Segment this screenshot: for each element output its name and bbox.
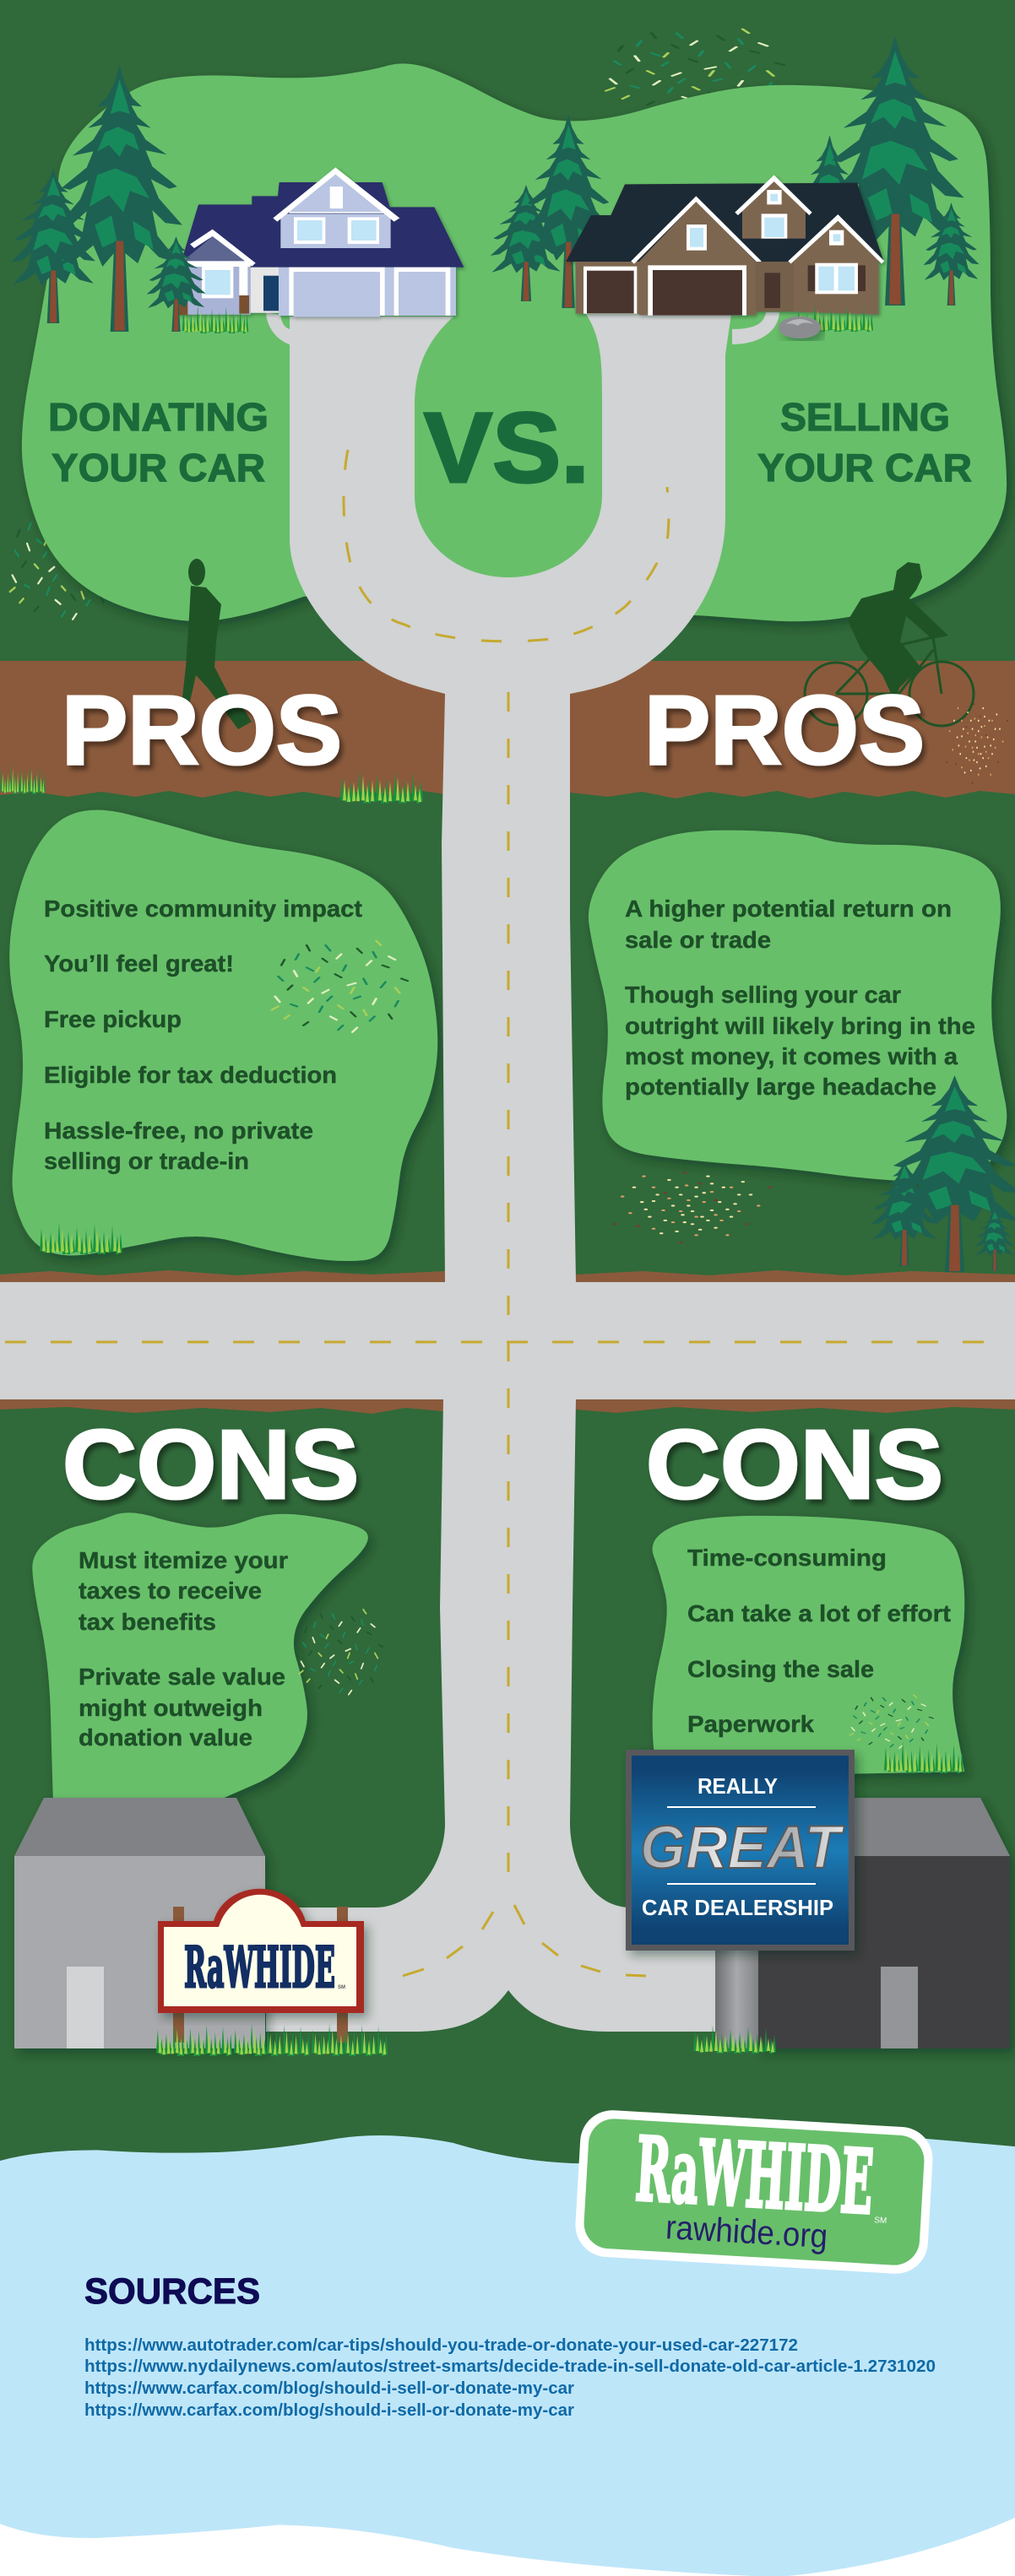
- dirt band: pros: [0, 661, 1015, 798]
- text block: selling pros: A higher potential return on: [625, 896, 952, 922]
- road centre dashes: [5, 450, 992, 1976]
- trees: top right: [791, 36, 980, 306]
- text block: donating pros: Hassle-free, no private: [44, 1118, 313, 1144]
- sign: great car dealership: CAR DEALERSHIP: [642, 1895, 833, 1920]
- grass in pros lawn: [40, 1222, 122, 1254]
- text block: selling pros: Though selling your car: [625, 982, 901, 1008]
- grass: blue house: [182, 306, 248, 333]
- heading: selling your car: [757, 395, 972, 490]
- panel: cons selling lawn: [653, 1516, 964, 1774]
- house: brown selling house: [566, 175, 884, 316]
- leaf cluster in cons left: [299, 1610, 383, 1695]
- grass under dealership sign: [693, 2026, 776, 2054]
- dots cluster in selling section: [615, 1172, 770, 1242]
- silhouette: walker: [179, 559, 252, 729]
- heading: cons left: CONS: [62, 1410, 359, 1519]
- text block: source links: [84, 2336, 936, 2420]
- sign: great car dealership: [626, 1750, 855, 2048]
- silhouette: cyclist: [805, 562, 974, 726]
- panel: cons donating lawn: [32, 1513, 368, 1799]
- text block: donating cons: [79, 1547, 288, 1751]
- text block: selling cons: [687, 1545, 951, 1737]
- trees: top left: [11, 65, 182, 332]
- sign: great car dealership: GREAT: [640, 1815, 844, 1881]
- text block: donating cons: Must itemize your: [79, 1547, 288, 1573]
- text block: selling pros: potentially large headache: [625, 1074, 936, 1100]
- dots cluster near right pros: [947, 704, 1007, 783]
- text block: selling pros: sale or trade: [625, 927, 771, 953]
- text block: donating cons: tax benefits: [79, 1609, 216, 1635]
- road network: [0, 312, 1015, 2032]
- heading: donating your car: YOUR CAR: [52, 446, 265, 490]
- text block: donating pros: [44, 896, 362, 1174]
- text block: donating cons: might outweigh: [79, 1695, 263, 1721]
- text block: source links: https://www.carfax.com/blog/should-i-sell-or-donate-my-car: [84, 2401, 574, 2420]
- building: dealership dark: [758, 1798, 1010, 2048]
- heading: selling your car: SELLING: [780, 395, 950, 439]
- sign: great car dealership: REALLY: [697, 1773, 778, 1799]
- text block: selling cons: Paperwork: [687, 1711, 814, 1737]
- text block: donating pros: You’ll feel great!: [44, 950, 234, 977]
- heading: donating your car: DONATING: [48, 395, 269, 439]
- logo badge: rawhide.org: [573, 2108, 935, 2276]
- grass in cons right: [884, 1741, 963, 1773]
- text block: donating cons: donation value: [79, 1724, 252, 1751]
- text block: donating pros: selling or trade-in: [44, 1148, 249, 1174]
- text block: donating cons: taxes to receive: [79, 1578, 262, 1604]
- panel: pros donating lawn: [9, 810, 437, 1261]
- heading: pros left: PROS: [62, 675, 342, 785]
- text block: selling cons: Closing the sale: [687, 1656, 874, 1682]
- text block: selling cons: Time-consuming: [687, 1545, 887, 1571]
- panel: top green lawn: [22, 63, 1007, 621]
- text block: selling pros: outright will likely bring in the: [625, 1013, 975, 1039]
- sign: rawhide: RaWHIDE: [184, 1935, 335, 2000]
- heading: selling your car: YOUR CAR: [757, 446, 972, 490]
- text block: selling pros: [625, 896, 975, 1100]
- grass under rawhide sign: [156, 2023, 388, 2056]
- leaf cluster left: [10, 506, 116, 620]
- logo badge: rawhide.org: SM: [874, 2216, 887, 2226]
- heading: vs.: VS.: [424, 392, 589, 504]
- text block: source links: https://www.autotrader.com/car-tips/should-you-trade-or-donate-your-used-car-227172: [84, 2336, 798, 2355]
- text block: source links: https://www.nydailynews.com/autos/street-smarts/decide-trade-in-sell-donate-old-car-article-1.2731020: [84, 2357, 936, 2376]
- grass on dirt band left: [1, 762, 45, 794]
- building: rawhide grey: [14, 1798, 265, 2048]
- leaf cluster in pros lawn: [272, 941, 408, 1032]
- text block: donating cons: Private sale value: [79, 1664, 285, 1690]
- tree in front of blue house: [146, 236, 206, 332]
- heading: cons right: CONS: [646, 1410, 943, 1519]
- logo badge: rawhide.org: rawhide.org: [665, 2209, 828, 2255]
- text block: donating pros: Positive community impact: [44, 896, 362, 922]
- leaf cluster in cons right: [849, 1695, 933, 1748]
- text block: selling cons: Can take a lot of effort: [687, 1600, 951, 1626]
- panel: pros selling lawn: [589, 831, 1007, 1182]
- heading: sources: SOURCES: [84, 2271, 260, 2312]
- house: blue donating house: [179, 167, 464, 317]
- grass: brown house: [797, 305, 873, 332]
- white bottom wave: [0, 2518, 1015, 2576]
- dirt strips by the cross road: [0, 1270, 1015, 1414]
- text block: selling pros: most money, it comes with a: [625, 1043, 958, 1069]
- text block: donating pros: Free pickup: [44, 1006, 182, 1032]
- trees: top centre: [491, 114, 613, 308]
- trees: lower right: [871, 1075, 1015, 1272]
- sign: rawhide: SM: [338, 1985, 345, 1990]
- grass on dirt band centre-left: [340, 770, 423, 804]
- leaf cluster top: [606, 29, 784, 111]
- rock: [779, 317, 821, 338]
- heading: pros right: PROS: [644, 675, 925, 785]
- heading: donating your car: [48, 395, 269, 490]
- panel: sky-blue sources area: [0, 2135, 1015, 2576]
- sign: rawhide: [158, 1889, 364, 2043]
- text block: donating pros: Eligible for tax deduction: [44, 1062, 337, 1088]
- text block: source links: https://www.carfax.com/blog/should-i-sell-or-donate-my-car: [84, 2379, 574, 2398]
